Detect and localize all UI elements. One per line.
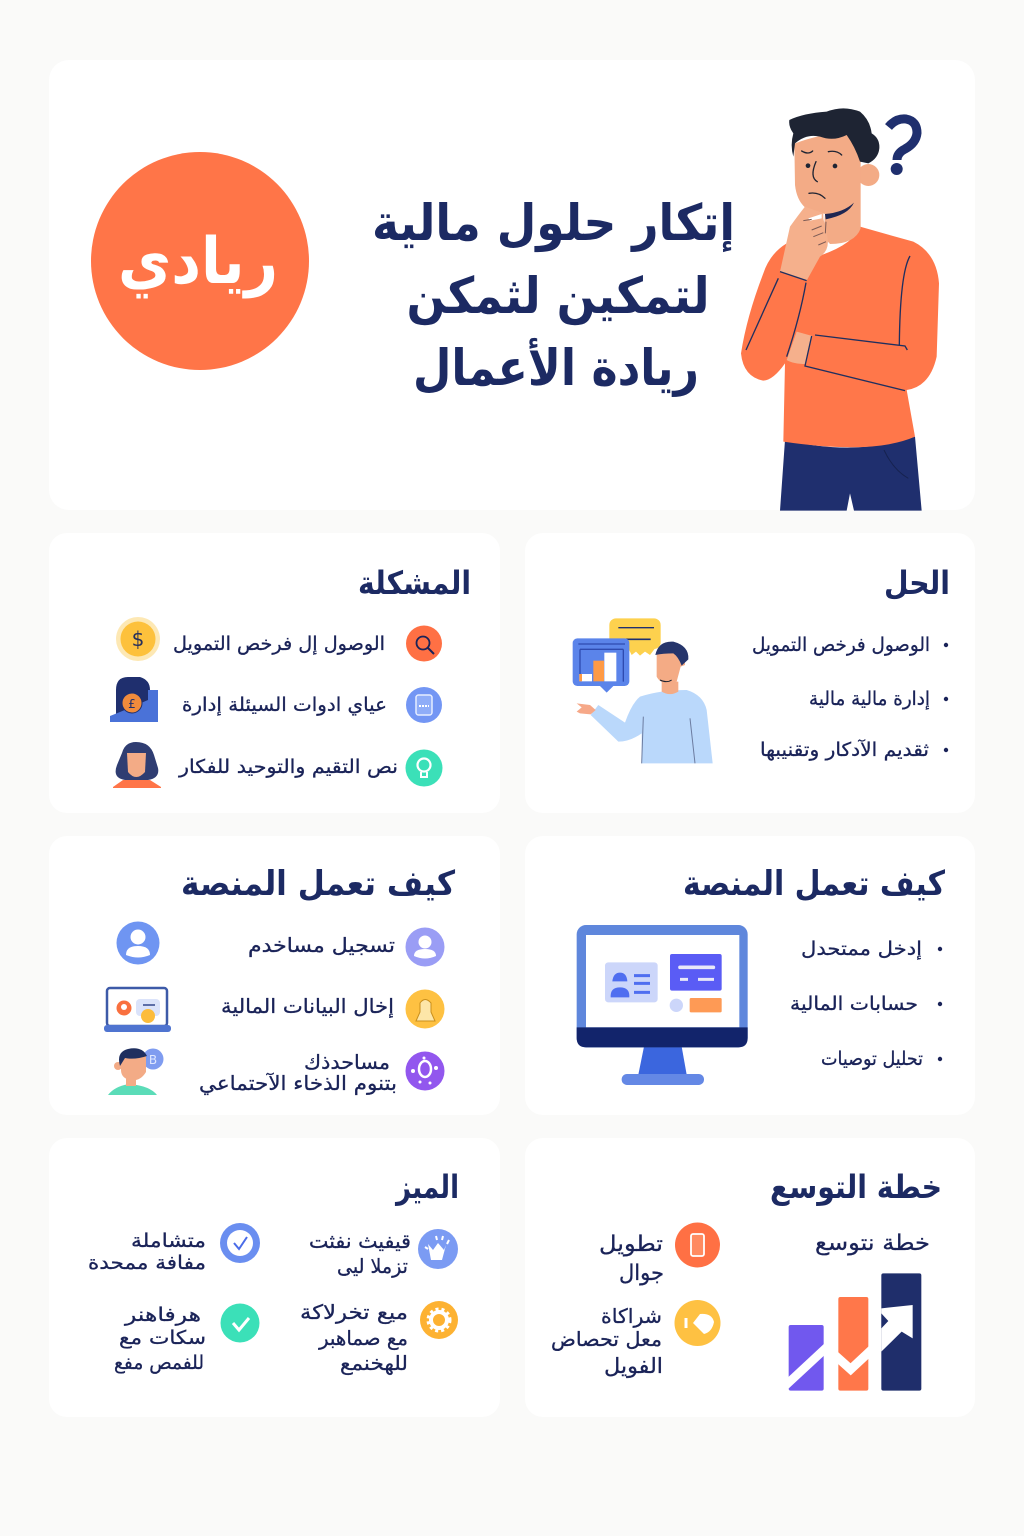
list: plan items: شراكاة xyxy=(601,1304,662,1328)
subheading: plan: خطة نتوسع xyxy=(815,1231,930,1256)
list: steps: مساحدذك xyxy=(304,1050,390,1074)
list: solution points xyxy=(752,634,948,761)
panel: hero xyxy=(49,60,975,511)
list: advantages right: تزملا ليى xyxy=(337,1254,408,1278)
list: advantages left xyxy=(88,1230,206,1374)
icon: boy avatar: B xyxy=(149,1053,157,1067)
icon: light bulb xyxy=(406,750,442,786)
panel: how it works (steps) xyxy=(49,836,500,1115)
list: advantages right xyxy=(300,1229,411,1375)
illustration: monitor xyxy=(577,925,748,1085)
panel: problem xyxy=(49,533,500,813)
list: problem points xyxy=(173,633,398,778)
title: ريادة الأعمال xyxy=(413,337,699,397)
heading: problem: المشكلة xyxy=(358,564,471,602)
icon: boy avatar xyxy=(108,1048,164,1095)
list: advantages left: مفافة ممحدة xyxy=(88,1252,206,1274)
icon: wallet with coin: £ xyxy=(128,697,136,711)
icon: gear xyxy=(420,1301,458,1339)
icon: woman avatar xyxy=(113,742,161,788)
icon: phone xyxy=(406,687,442,723)
icon: check blue xyxy=(220,1223,260,1263)
icon: hand xyxy=(418,1229,458,1269)
list: features: حسابات المالية xyxy=(790,993,918,1015)
panel: solution xyxy=(525,533,975,813)
title: إتكار حلول مالية xyxy=(372,194,735,253)
chart: growth bars xyxy=(785,1273,921,1391)
list: plan items: الفويل xyxy=(604,1354,663,1378)
list: advantages right: ميع تخرلاكة xyxy=(300,1300,408,1324)
illustration: presenter with charts xyxy=(573,618,713,763)
icon: violet dots xyxy=(406,1052,444,1090)
icon: wallet with coin xyxy=(110,677,158,722)
list: advantages left: هرفاهنر xyxy=(124,1304,201,1326)
list: plan items: تطويل xyxy=(599,1232,663,1257)
title: لتمكين لثمكن xyxy=(406,267,710,326)
icon: user purple xyxy=(406,928,444,966)
icon: coin xyxy=(116,617,160,661)
panel: how it works (features) xyxy=(525,836,975,1115)
panel: expansion plan xyxy=(525,1138,975,1417)
list: plan items: جوال xyxy=(619,1261,664,1286)
list: advantages right: للهخنمع xyxy=(340,1351,408,1375)
list: plan items xyxy=(551,1232,664,1378)
list: problem points: الوصول إل فرخص التمويل xyxy=(173,633,385,656)
icon: partnership xyxy=(674,1300,720,1346)
heading: how the platform works: كيف تعمل المنصة xyxy=(683,864,945,904)
list: features xyxy=(790,938,942,1070)
list: advantages right: قيفيث نفثت xyxy=(309,1229,411,1253)
list: steps: إخال البيانات المالية xyxy=(221,994,394,1019)
list: steps: بتنوم الذخاء الآحتماعي xyxy=(199,1071,397,1096)
heading: solution: الحل xyxy=(884,564,950,602)
list: features: تحليل توصيات xyxy=(821,1048,923,1070)
list: steps: تسجيل مساخدم xyxy=(248,933,395,957)
panel: advantages xyxy=(49,1138,500,1417)
title xyxy=(372,194,735,397)
list: advantages left: سكات مع xyxy=(119,1327,206,1349)
list: problem points: نص التقيم والتوحيد للفكار xyxy=(178,756,398,778)
list: solution points: الوصول فرخص التمويل xyxy=(752,634,930,656)
list: steps xyxy=(199,933,397,1096)
heading: advantages: الميز xyxy=(394,1168,459,1206)
badge: ريادي xyxy=(91,152,309,370)
icon: question mark xyxy=(888,119,917,175)
icon: mobile xyxy=(675,1222,720,1268)
icon: laptop xyxy=(104,988,171,1032)
icon: check green xyxy=(220,1304,260,1342)
list: advantages left: للفمص مفع xyxy=(114,1352,204,1374)
list: advantages left: متشاملة xyxy=(131,1230,206,1252)
heading: expansion plan: خطة التوسع xyxy=(770,1168,942,1206)
heading: how the platform works: كيف تعمل المنصة xyxy=(181,864,455,904)
icon: yellow id xyxy=(406,990,444,1028)
badge: ريادي: ريادي xyxy=(118,225,278,299)
list: features: إدخل ممتحدل xyxy=(801,938,922,961)
list: solution points: إدارة مالية مالية xyxy=(809,688,930,711)
icon: coin: $ xyxy=(132,627,144,651)
list: solution points: ثقديم الآدكار وتقنيبها xyxy=(760,739,929,761)
list: plan items: معل تحصاض xyxy=(551,1327,662,1351)
list: advantages right: مع صماهبر xyxy=(318,1326,408,1350)
icon: magnifier xyxy=(406,626,442,662)
icon: user blue xyxy=(116,922,160,964)
illustration: thinking man xyxy=(741,108,939,511)
list: problem points: عياي ادوات السيئلة إدارة xyxy=(182,694,387,717)
